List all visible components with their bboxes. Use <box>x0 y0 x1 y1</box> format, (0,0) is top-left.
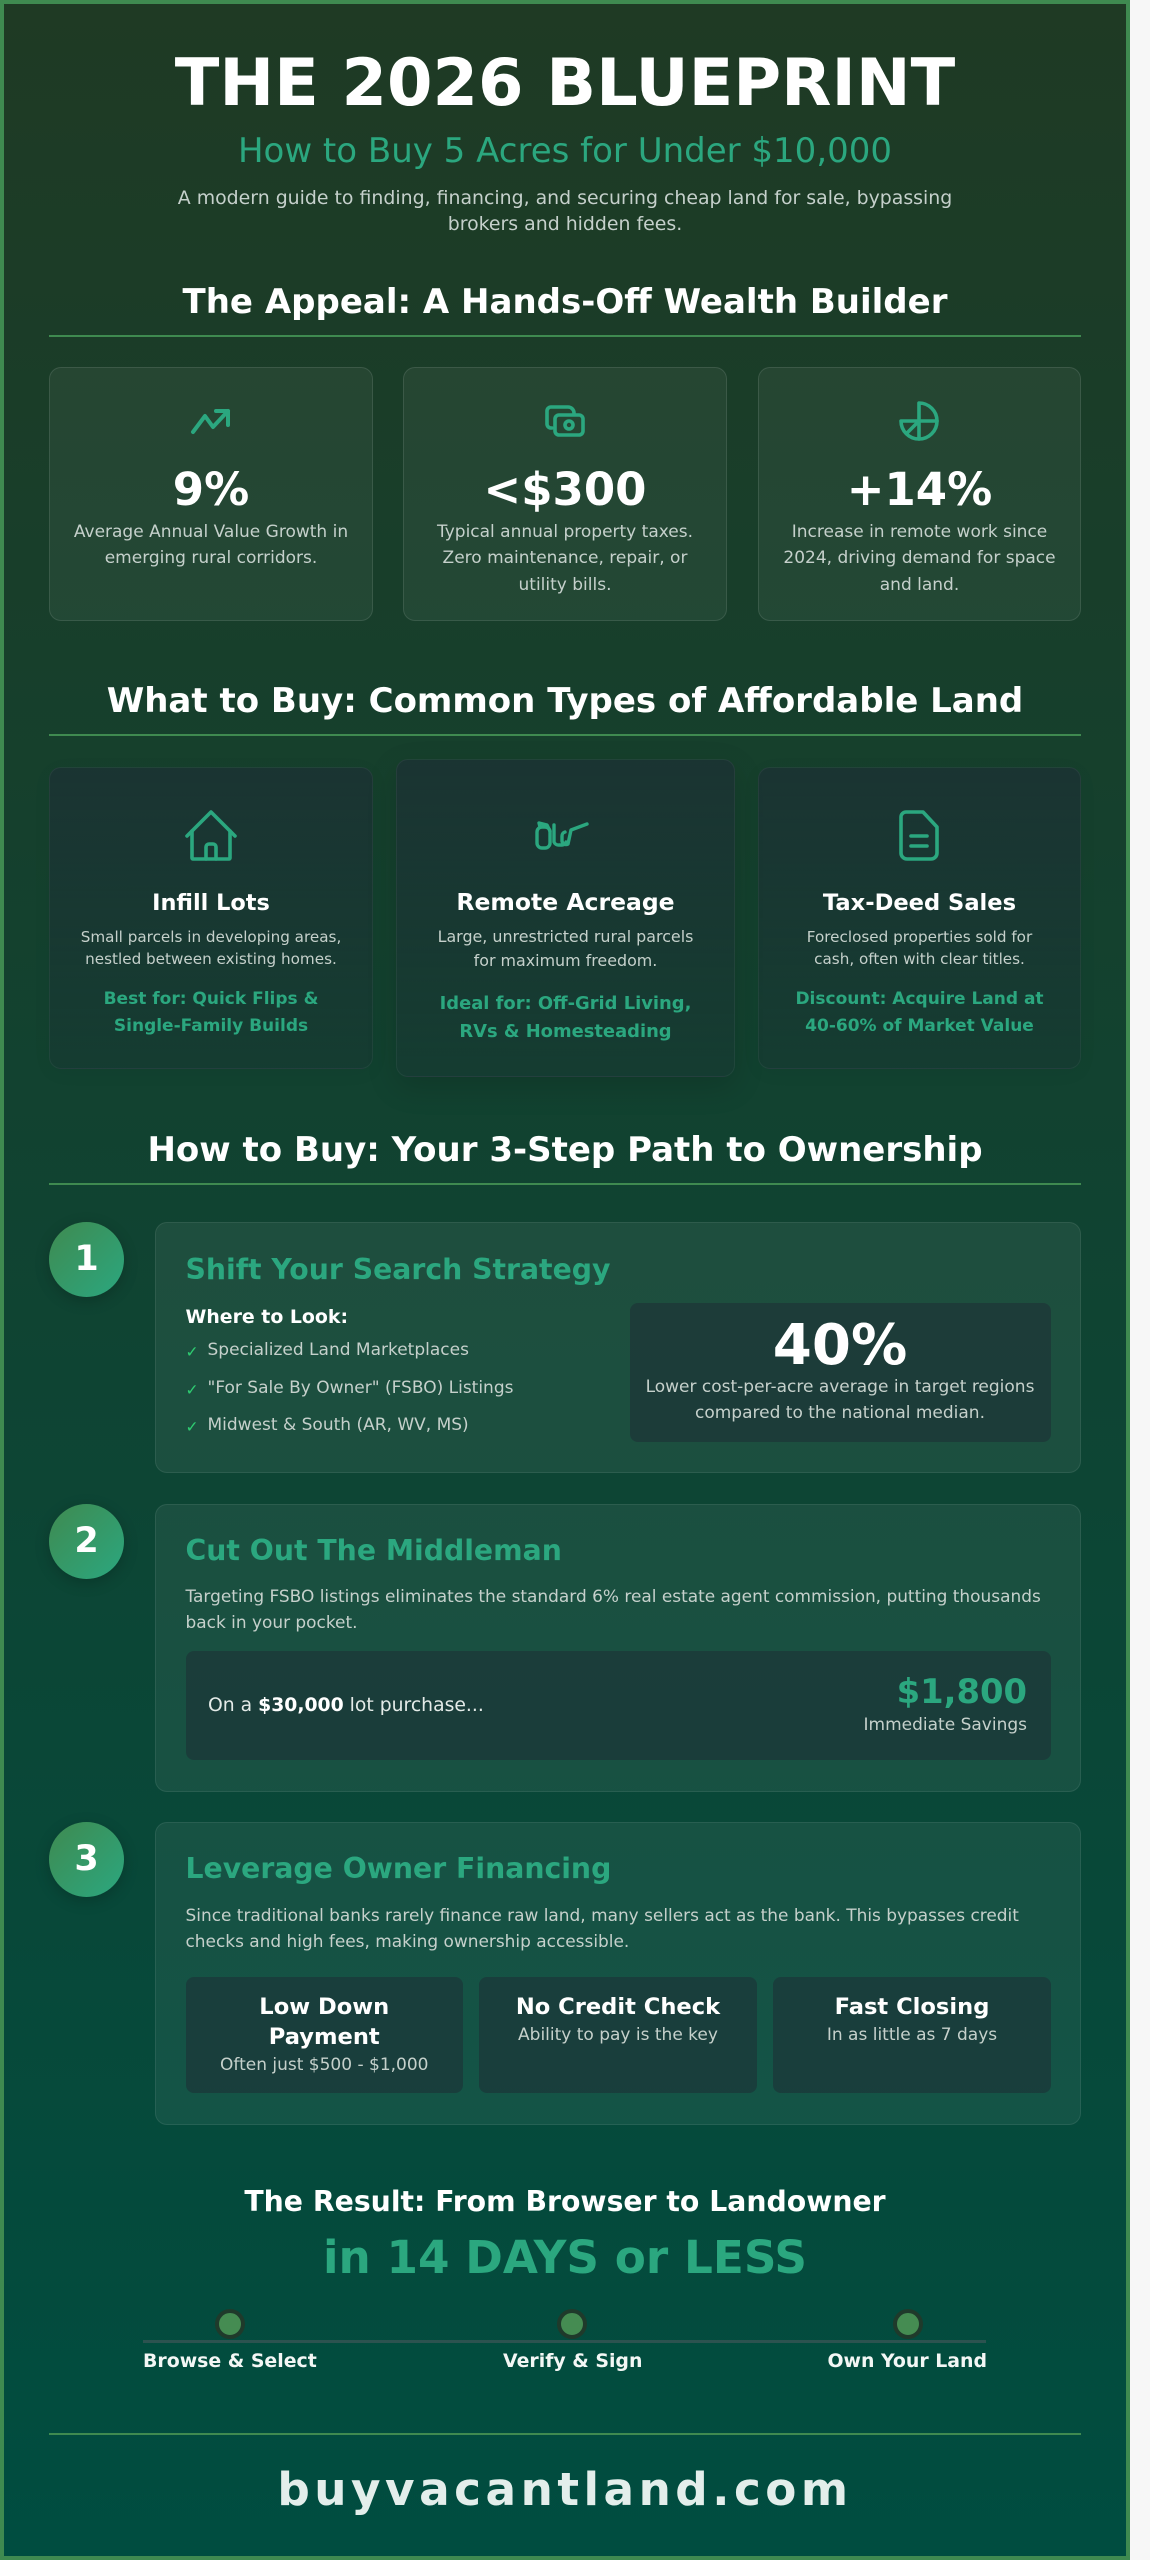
benefit title: low down payment: Payment <box>269 2024 380 2050</box>
step 2 number <box>49 1504 124 1578</box>
heading: what to buy: What to Buy: Common Types of Affordable Land <box>107 680 1023 720</box>
card text: remote acreage: for maximum freedom. <box>474 951 657 970</box>
benefit: low down payment <box>186 1977 463 2093</box>
card title: tax-deed sales: Tax-Deed Sales <box>823 890 1016 916</box>
card text: tax-deed sales: cash, often with clear titles. <box>814 950 1025 968</box>
checklist <box>186 1340 513 1436</box>
step 2 text <box>185 1586 1041 1632</box>
card note: remote acreage: RVs & Homesteading <box>459 1021 672 1042</box>
panel: stat 9% <box>49 367 373 621</box>
benefit text: fast closing: In as little as 7 days <box>827 2025 997 2045</box>
callout text: 40%: Lower cost-per-acre average in target regions <box>646 1377 1034 1397</box>
step 2 number: 2 <box>74 1520 99 1560</box>
benefit text: no credit check: Ability to pay is the key <box>518 2025 718 2045</box>
timeline dot 1 <box>215 2309 245 2339</box>
text: 9% description <box>74 522 348 568</box>
step 3 text: Since traditional banks rarely finance raw land, many sellers act as the bank. This bypasses credit <box>186 1905 1019 1925</box>
stat: 9%: 9% <box>173 463 249 516</box>
step 3 title: Leverage Owner Financing <box>186 1852 611 1885</box>
benefit title: no credit check: No Credit Check <box>516 1994 720 2020</box>
card note: tax-deed sales <box>795 989 1044 1036</box>
card text: infill lots <box>81 928 341 968</box>
icon: house <box>185 810 237 861</box>
step 2 title: Cut Out The Middleman <box>186 1534 562 1566</box>
icon: document <box>899 810 939 861</box>
result heading: The Result: From Browser to Landowner <box>244 2185 886 2218</box>
checklist: Specialized Land Marketplaces <box>208 1340 469 1360</box>
step 3 number <box>49 1822 124 1896</box>
step 3 number: 3 <box>74 1838 99 1878</box>
card title: infill lots: Infill Lots <box>152 890 270 916</box>
callout box: 40% <box>630 1303 1050 1442</box>
step 2 text: Targeting FSBO listings eliminates the standard 6% real estate agent commission, putting thousands <box>186 1586 1041 1606</box>
stat: under $300: <$300 <box>484 463 646 516</box>
benefit: fast closing <box>773 1977 1051 2093</box>
label: where to look: Where to Look: <box>186 1306 348 1328</box>
card note: infill lots: Single-Family Builds <box>114 1016 308 1036</box>
benefit title: low down payment: Low Down <box>259 1994 389 2020</box>
panel: step 3 <box>155 1822 1081 2124</box>
intro text: A modern guide to finding, financing, and securing cheap land for sale, bypassing <box>178 187 952 209</box>
savings text: On a $30,000 lot purchase... <box>208 1695 484 1716</box>
panel: remote acreage <box>396 759 735 1077</box>
icon: trending up <box>190 408 230 434</box>
benefit: no credit check <box>479 1977 757 2093</box>
text: under $300 description: Zero maintenance, repair, or <box>443 548 687 568</box>
card text: tax-deed sales: Foreclosed properties sold for <box>807 928 1032 946</box>
card text: tax-deed sales <box>807 928 1032 968</box>
savings label: Immediate Savings <box>864 1715 1027 1735</box>
callout text: 40% <box>646 1377 1034 1423</box>
checklist: ✓ <box>186 1381 198 1399</box>
text: +14% description <box>783 522 1056 595</box>
text: +14% description: and land. <box>880 575 959 595</box>
checklist: Midwest & South (AR, WV, MS) <box>208 1415 469 1435</box>
benefit title: fast closing: Fast Closing <box>835 1994 989 2020</box>
text: +14% description: 2024, driving demand for space <box>783 548 1056 568</box>
panel: infill lots <box>49 767 373 1069</box>
panel: stat +14% <box>758 367 1081 621</box>
timeline dot 2 <box>557 2309 587 2339</box>
card note: tax-deed sales: Discount: Acquire Land at <box>795 989 1044 1009</box>
text: 9% description: Average Annual Value Growth in <box>74 522 348 542</box>
text: under $300 description: Typical annual property taxes. <box>437 522 693 542</box>
panel: step 1 <box>155 1222 1081 1473</box>
card text: remote acreage <box>438 927 693 970</box>
text: under $300 description <box>436 522 693 595</box>
step 3 text: checks and high fees, making ownership accessible. <box>186 1931 629 1951</box>
benefit title: low down payment <box>259 1994 389 2050</box>
card note: infill lots <box>104 989 318 1036</box>
footer url: buyvacantland.com <box>277 2463 853 2516</box>
subtitle: How to Buy 5 Acres for Under $10,000 <box>238 131 892 171</box>
icon: pie chart <box>899 401 939 441</box>
panel: stat under $300 <box>403 367 727 621</box>
card text: infill lots: Small parcels in developing areas, <box>81 928 341 946</box>
savings box <box>186 1651 1050 1760</box>
timeline label 2: Verify & Sign <box>503 2350 642 2372</box>
title: THE 2026 BLUEPRINT <box>175 45 955 121</box>
heading: the appeal: The Appeal: A Hands-Off Wealth Builder <box>183 282 947 322</box>
stat: +14%: +14% <box>847 463 992 516</box>
result highlight: in 14 DAYS or LESS <box>323 2230 807 2284</box>
text: 9% description: emerging rural corridors. <box>105 548 317 568</box>
intro text: brokers and hidden fees. <box>448 213 682 235</box>
card note: tax-deed sales: 40-60% of Market Value <box>805 1016 1034 1036</box>
timeline label 1: Browse & Select <box>143 2350 317 2372</box>
heading: how to buy: How to Buy: Your 3-Step Path to Ownership <box>147 1130 983 1170</box>
step 3 text <box>186 1905 1019 1951</box>
callout text: 40%: compared to the national median. <box>695 1403 985 1423</box>
step 1 title: Shift Your Search Strategy <box>186 1253 610 1286</box>
timeline dot 3 <box>893 2309 923 2339</box>
card note: remote acreage: Ideal for: Off-Grid Living, <box>440 993 691 1014</box>
checklist: ✓ <box>186 1343 198 1361</box>
step 1 number: 1 <box>74 1239 99 1279</box>
text: under $300 description: utility bills. <box>519 575 611 595</box>
card note: remote acreage <box>440 993 691 1042</box>
benefit text: low down payment: Often just $500 - $1,000 <box>220 2055 428 2075</box>
callout stat: 40%: 40% <box>773 1313 907 1378</box>
panel: tax-deed sales <box>758 767 1081 1069</box>
text: +14% description: Increase in remote work since <box>792 522 1047 542</box>
card text: remote acreage: Large, unrestricted rural parcels <box>438 927 693 946</box>
icon: money <box>545 405 585 437</box>
step 1 number <box>49 1222 124 1297</box>
icon: binoculars <box>535 821 589 850</box>
intro text <box>178 187 952 235</box>
panel: step 2 <box>155 1504 1081 1792</box>
card note: infill lots: Best for: Quick Flips & <box>104 989 318 1009</box>
timeline label 3: Own Your Land <box>827 2350 987 2372</box>
checklist: "For Sale By Owner" (FSBO) Listings <box>208 1378 513 1398</box>
checklist: ✓ <box>186 1418 198 1436</box>
step 2 text: back in your pocket. <box>186 1612 358 1632</box>
savings amount: $1,800 <box>897 1672 1027 1711</box>
card title: remote acreage: Remote Acreage <box>456 888 675 916</box>
card text: infill lots: nestled between existing homes. <box>85 950 337 968</box>
timeline <box>143 2340 986 2343</box>
